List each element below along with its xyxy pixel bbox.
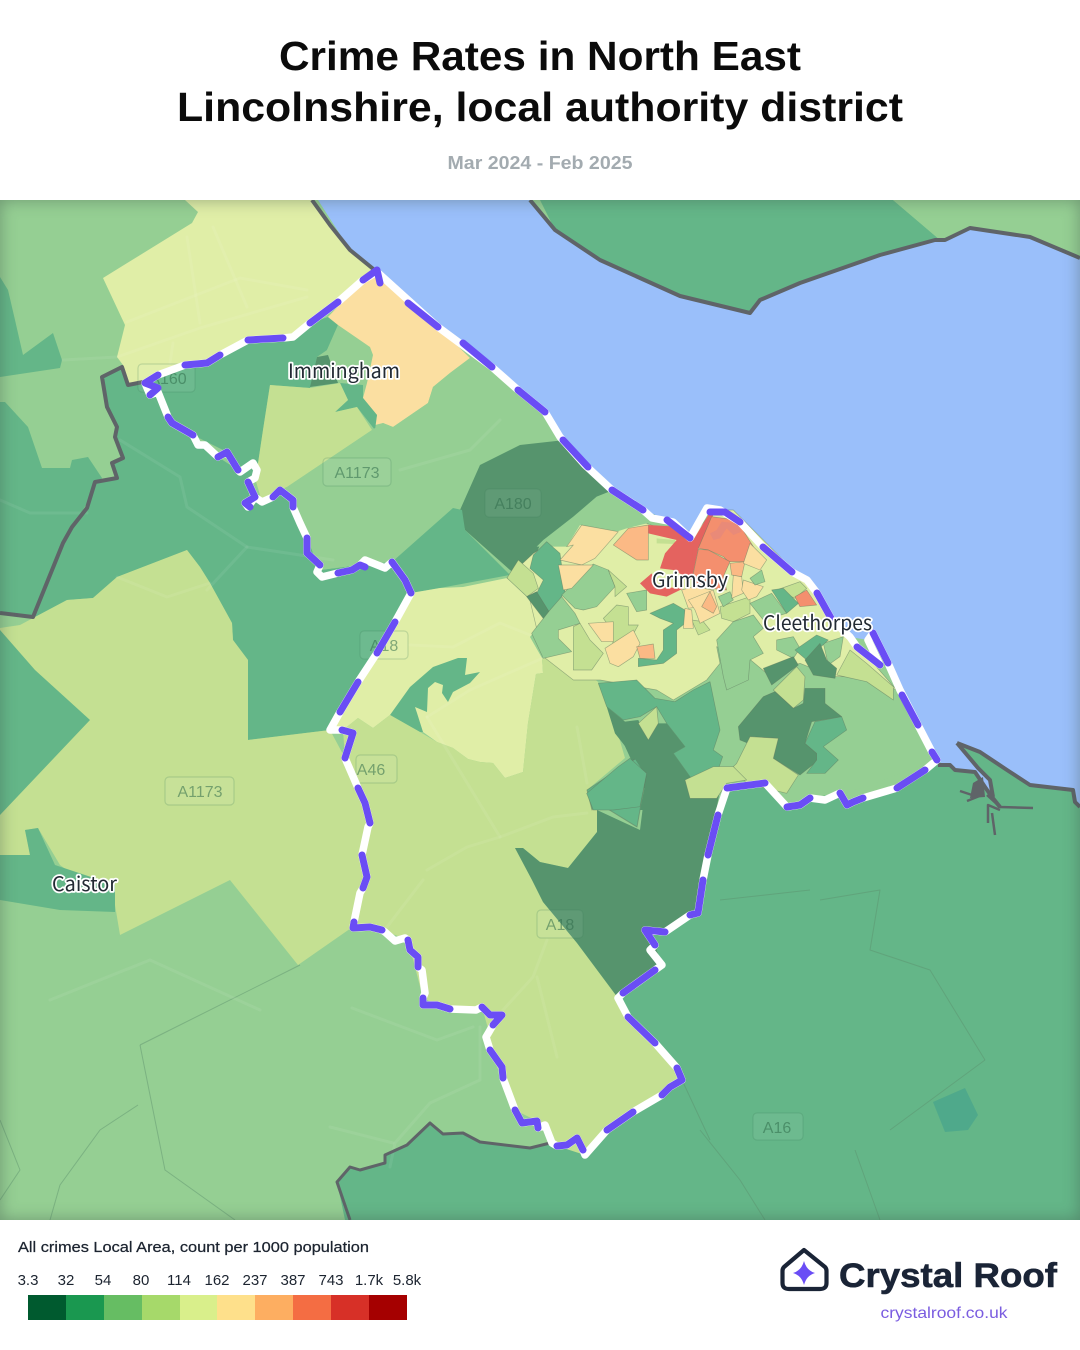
road labels: A46 bbox=[357, 762, 385, 779]
road labels: A1173 bbox=[334, 465, 380, 482]
road labels: A180 bbox=[494, 496, 532, 513]
place labels: Immingham bbox=[288, 355, 400, 384]
outside regions west and south bbox=[0, 200, 1080, 1220]
logo: Crystal Roof bbox=[782, 1250, 1058, 1295]
sea: Humber estuary bbox=[318, 200, 1080, 807]
choropleth map bbox=[0, 200, 1080, 1220]
legend: crime rate colour scale: 237 bbox=[242, 1272, 268, 1289]
legend: crime rate colour scale: 1.7k bbox=[355, 1272, 384, 1289]
logo: Crystal Roof: Crystal Roof bbox=[839, 1257, 1058, 1295]
legend: crime rate colour scale: 387 bbox=[280, 1272, 306, 1289]
legend: crime rate colour scale: All crimes Local Area, count per 1000 population bbox=[18, 1239, 369, 1256]
faint road network bbox=[2, 278, 544, 1168]
legend: crime rate colour scale bbox=[18, 1239, 422, 1320]
Grimsby and Cleethorpes neighbourhoods bbox=[507, 490, 933, 810]
road labels: A18 bbox=[370, 638, 398, 655]
road labels: A18 bbox=[546, 917, 574, 934]
road labels bbox=[138, 364, 803, 1140]
legend: crime rate colour scale: 80 bbox=[133, 1272, 149, 1289]
place labels bbox=[52, 355, 872, 897]
legend: crime rate colour scale: 162 bbox=[204, 1272, 230, 1289]
road labels: A16 bbox=[763, 1120, 791, 1137]
road labels: A1173 bbox=[177, 784, 223, 801]
place labels: Caistor bbox=[52, 868, 117, 897]
legend: crime rate colour scale: 32 bbox=[58, 1272, 74, 1289]
north bank of estuary bbox=[540, 200, 938, 311]
inside regions of the district bbox=[145, 272, 720, 1155]
legend: crime rate colour scale: 114 bbox=[167, 1272, 191, 1289]
district boundary: white with purple dashes bbox=[145, 270, 937, 1155]
website link: crystalroof.co.uk bbox=[880, 1305, 1009, 1322]
road labels: A160 bbox=[149, 371, 187, 388]
legend: crime rate colour scale: 54 bbox=[95, 1272, 111, 1289]
legend: crime rate colour scale: 5.8k bbox=[393, 1272, 422, 1289]
legend: crime rate colour scale: 3.3 bbox=[18, 1272, 38, 1289]
place labels: Grimsby bbox=[652, 564, 729, 593]
title bbox=[177, 33, 903, 130]
title: Lincolnshire, local authority district bbox=[177, 84, 903, 130]
title: Crime Rates in North East bbox=[279, 33, 801, 79]
legend: crime rate colour scale: 743 bbox=[318, 1272, 344, 1289]
coastline and outer borders bbox=[0, 200, 1080, 1220]
subtitle: date range: Mar 2024 - Feb 2025 bbox=[448, 153, 632, 173]
place labels: Cleethorpes bbox=[763, 607, 872, 636]
